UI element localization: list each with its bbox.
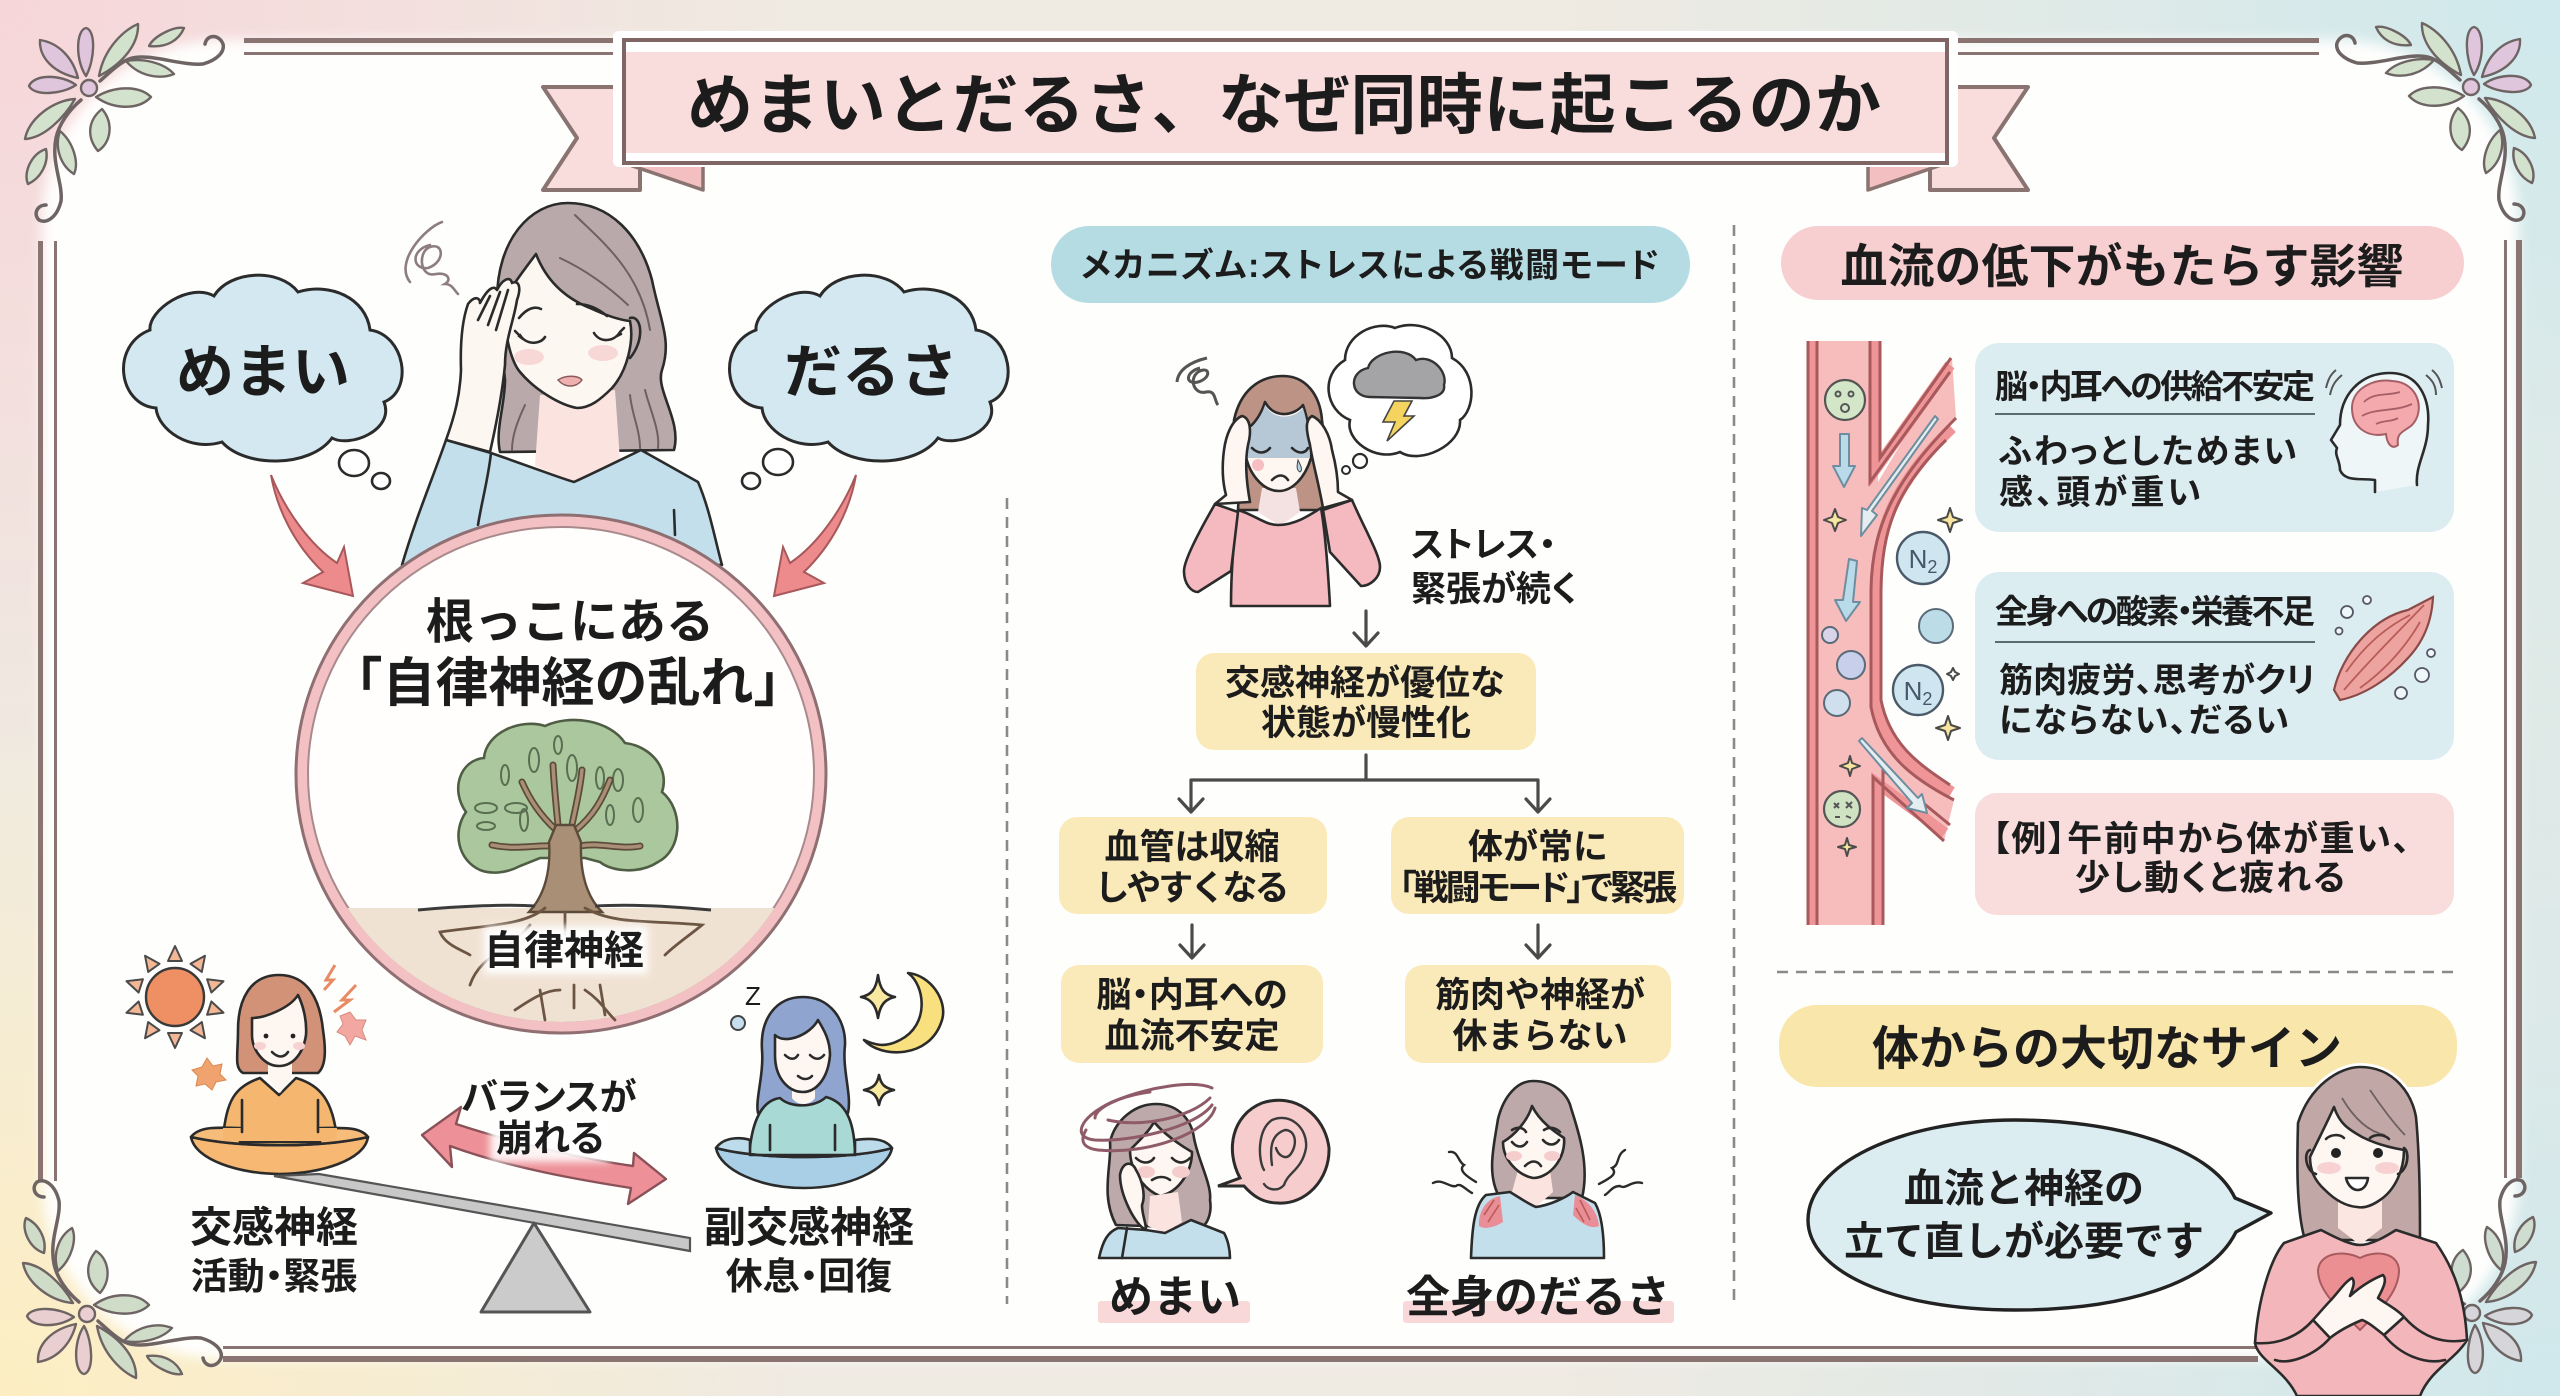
sparkles [1824, 508, 1962, 856]
root cause circle [296, 515, 826, 1038]
sweater [1231, 508, 1330, 606]
mechanism heading [1051, 226, 1690, 303]
stress text: ストレス・ [1411, 526, 1556, 565]
corner ornament: top left [25, 24, 223, 221]
nitrogen bubble: upper: 2 [1927, 557, 1937, 577]
nitrogen bubble: lower [1893, 665, 1943, 715]
woman with tense shoulders [1433, 1081, 1642, 1258]
icon: muscle [2334, 596, 2435, 700]
ear speech bubble [1218, 1100, 1329, 1203]
sympathetic nerve woman with sun [124, 946, 368, 1174]
smiling woman with heart [2255, 1067, 2467, 1396]
stress spiral [1177, 358, 1218, 405]
stressed woman [1177, 325, 1471, 606]
thought cloud [1329, 325, 1471, 456]
lightning [1383, 401, 1414, 441]
box: vessels constrict [1059, 817, 1327, 914]
box: vessels constrict: しやすくなる [1094, 869, 1290, 908]
mechanism heading: メカニズム:ストレスによる戦闘モード [1081, 246, 1659, 285]
card: example: 【例】午前中から体が重い、 [1992, 820, 2410, 859]
parasympathetic nerve woman with moon [716, 973, 943, 1188]
nitrogen bubble: lower: 2 [1922, 689, 1932, 709]
face [505, 254, 631, 408]
sympathetic label: 活動・緊張 [191, 1256, 357, 1297]
card: oxygen and nutrition: 全身への酸素・栄養不足 [1995, 593, 2315, 630]
stress text: 緊張が続く [1411, 570, 1577, 609]
parasympathetic label: 休息・回復 [726, 1256, 892, 1297]
bubble dots [339, 450, 369, 476]
hair [2297, 1067, 2420, 1240]
root label: 自律神経 [484, 929, 644, 973]
column dividers [1007, 225, 2458, 1304]
box: battle mode: 体が常に [1468, 828, 1608, 867]
arrow: left cloud to circle [271, 475, 353, 596]
blood vessel illustration [1807, 341, 1962, 925]
balance label [461, 1077, 637, 1162]
soil [348, 908, 774, 1022]
speech bubble: 血流と神経の [1904, 1167, 2144, 1211]
ear [1260, 1118, 1306, 1189]
sign heading [1779, 1005, 2457, 1087]
beam [274, 1174, 690, 1251]
neck [2338, 1195, 2382, 1245]
sympathetic label: 交感神経 [190, 1204, 358, 1251]
face [2310, 1107, 2404, 1207]
hair [1108, 1104, 1211, 1228]
flow arrows [1833, 416, 1938, 813]
panel: blood flow effects [1781, 226, 2464, 925]
box: unstable blood flow: 脳・内耳への [1096, 976, 1288, 1015]
card: example [1975, 793, 2454, 915]
corner ornament: bottom left [23, 1181, 221, 1378]
sweater [1471, 1192, 1604, 1258]
nitrogen bubble: lower: N [1904, 676, 1922, 706]
panel: important sign [1779, 1005, 2467, 1396]
heading: 根っこにある [426, 596, 714, 649]
speech bubble: 立て直しが必要です [1844, 1220, 2204, 1264]
box: sympathetic dominance: 状態が慢性化 [1261, 704, 1471, 743]
parasympathetic label: 副交感神経 [704, 1204, 914, 1251]
blood cell faces [1825, 380, 1865, 420]
hands [2313, 1275, 2404, 1338]
fatigue label: 全身のだるさ [1406, 1273, 1670, 1322]
sympathetic label [190, 1204, 358, 1297]
card: oxygen and nutrition: にならない、だるい [1999, 702, 2289, 740]
box: sympathetic dominance: 交感神経が優位な [1225, 664, 1505, 703]
face [1130, 1122, 1192, 1196]
card: oxygen and nutrition: 筋肉疲労、思考がクリ [1999, 661, 2315, 700]
root cause circle: 「自律神経の乱れ」 [330, 654, 806, 713]
hair [1492, 1081, 1585, 1198]
arrow: left down [1180, 925, 1204, 958]
box: unstable blood flow: 血流不安定 [1104, 1017, 1280, 1056]
neck [535, 390, 620, 482]
face [252, 995, 306, 1066]
bowl [191, 1137, 368, 1174]
box: unstable blood flow [1061, 965, 1323, 1063]
sweater [2255, 1230, 2467, 1396]
balance label: 崩れる [496, 1118, 604, 1159]
face [1503, 1106, 1564, 1178]
box: sympathetic dominance [1196, 653, 1536, 750]
thought cloud: めまい [124, 275, 402, 489]
label: めまい [176, 340, 350, 405]
box: battle mode [1391, 817, 1684, 914]
nitrogen bubble: upper [1897, 532, 1949, 584]
spinning rings [1081, 1084, 1215, 1151]
parasympathetic label [704, 1204, 914, 1297]
dizzy woman [1081, 1084, 1230, 1258]
sweater [402, 440, 722, 565]
box: muscles do not rest: 休まらない [1452, 1017, 1628, 1056]
icon: head with brain [2326, 370, 2442, 492]
hands [1215, 416, 1250, 504]
hair [757, 997, 849, 1113]
ribbon left tail [543, 87, 640, 190]
arrow: down to box 1 [1354, 611, 1378, 646]
sign heading: 体からの大切なサイン [1872, 1022, 2342, 1075]
card: example: 少し動くと疲れる [2075, 859, 2345, 898]
thought cloud: だるさ [730, 275, 1008, 489]
ribbon right tail [1930, 87, 2028, 190]
hair [497, 203, 675, 452]
fulcrum [481, 1223, 590, 1312]
woman with dizziness [402, 203, 722, 565]
moon [864, 973, 943, 1052]
balance double arrow [422, 1107, 666, 1204]
nitrogen bubble: upper: N [1909, 544, 1927, 574]
speech bubble [1808, 1120, 2271, 1310]
card: brain and inner ear: 感、頭が重い [1999, 473, 2201, 512]
shoulder pain [1479, 1195, 1599, 1228]
box: muscles do not rest: 筋肉や神経が [1435, 976, 1645, 1015]
heart [2318, 1254, 2399, 1330]
card: brain and inner ear: 脳・内耳への供給不安定 [1995, 368, 2315, 405]
blood flow heading: 血流の低下がもたらす影響 [1840, 240, 2404, 293]
box: muscles do not rest [1405, 965, 1671, 1063]
seesaw [274, 1174, 690, 1312]
branch connector [1179, 755, 1550, 812]
hair [237, 975, 325, 1073]
sleep marks: Z [745, 981, 761, 1011]
title text: めまいとだるさ、なぜ同時に起こるのか [687, 68, 1881, 142]
sweater [1099, 1220, 1230, 1258]
sun [124, 946, 226, 1048]
blood flow heading [1781, 226, 2464, 300]
balance label: バランスが [461, 1077, 637, 1118]
arrow: right down [1526, 925, 1550, 958]
tree [418, 720, 711, 912]
stress text [1411, 526, 1577, 609]
hair [1234, 376, 1324, 510]
corner ornament: top right [2337, 23, 2535, 220]
hand [446, 279, 519, 452]
box: vessels constrict: 血管は収縮 [1104, 828, 1280, 867]
panel: mechanism [1051, 226, 1690, 1323]
dizziness label: めまい [1109, 1273, 1241, 1322]
title ribbon [543, 31, 2028, 190]
neck and sweater [223, 1078, 337, 1139]
root label halo [484, 926, 648, 974]
corner ornament: bottom right [2338, 1180, 2536, 1377]
neck [1258, 488, 1300, 526]
spiral [406, 222, 458, 294]
card: oxygen and nutrition [1975, 572, 2454, 760]
arrow: right cloud to circle [774, 475, 856, 596]
bowl [716, 1148, 892, 1188]
roots [440, 908, 702, 1020]
card: brain and inner ear: ふわっとしためまい [1998, 433, 2297, 471]
thought cloud: だるさ: だるさ [784, 340, 958, 405]
sparkles [861, 975, 895, 1018]
bubbles [1822, 609, 1953, 716]
hand [1120, 1164, 1146, 1230]
stress marks [324, 965, 356, 1012]
tension marks [1433, 1150, 1642, 1195]
card: brain and inner ear [1975, 343, 2454, 532]
face [1245, 402, 1311, 491]
box: battle mode: 「戦闘モード」で緊張 [1399, 869, 1677, 908]
